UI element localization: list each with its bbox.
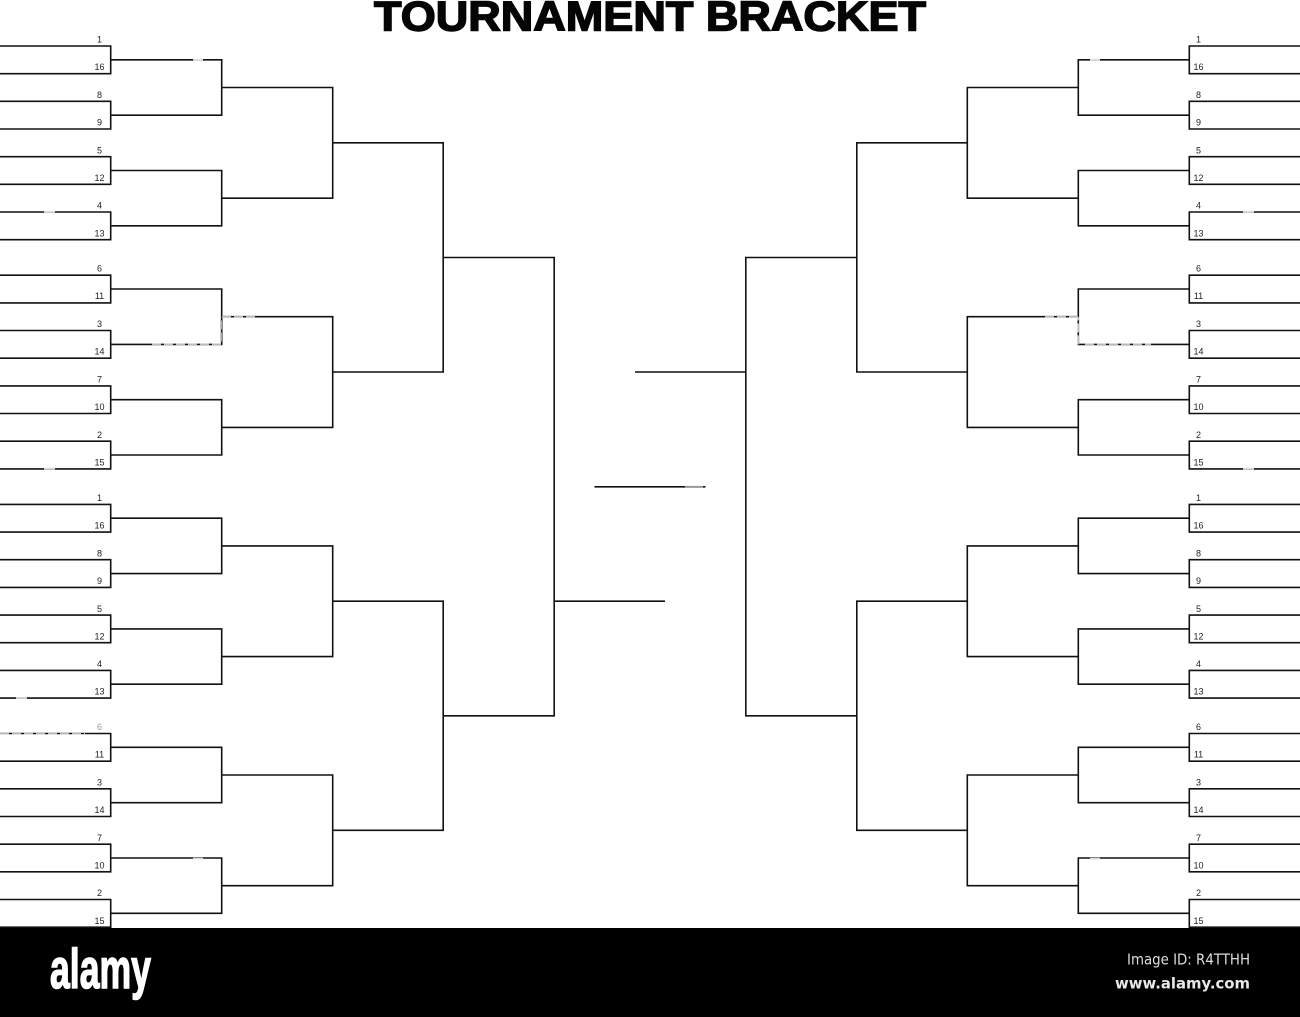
right seeds region 4: 15: [1193, 916, 1204, 926]
right seeds region 2: 6: [1196, 264, 1201, 274]
right seeds region 3: 8: [1196, 548, 1201, 558]
left region 4: 2: [97, 888, 102, 898]
right seeds region 3: 5: [1196, 604, 1201, 614]
right seeds region 1: 9: [1196, 118, 1201, 128]
right seeds region 3: 4: [1196, 659, 1201, 669]
champion line: [594, 486, 706, 488]
right seeds region 1: 12: [1193, 173, 1204, 183]
right seeds region 4: [1193, 722, 1204, 926]
right seeds region 4: 2: [1196, 888, 1201, 898]
right seeds region 1: 13: [1193, 228, 1204, 238]
left region 3: 4: [97, 659, 102, 669]
right seeds region 3: 16: [1193, 520, 1204, 530]
left region 1: 5: [97, 146, 102, 156]
left region 4: 6: [97, 722, 102, 732]
left region 4: 10: [94, 860, 105, 870]
website: www.alamy.com: [1115, 974, 1250, 992]
right seeds region 3: 13: [1193, 687, 1204, 697]
left region 3: 13: [94, 687, 105, 697]
right seeds region 4: 7: [1196, 833, 1201, 843]
left region 2: 2: [97, 430, 102, 440]
right bracket: [635, 34, 1300, 927]
right seeds region 2: 15: [1193, 458, 1204, 468]
right seeds region 1: 1: [1196, 34, 1201, 44]
right seeds region 3: 9: [1196, 576, 1201, 586]
right seeds region 2: 14: [1193, 347, 1204, 357]
right seeds region 1: 5: [1196, 146, 1201, 156]
left region 1: 4: [97, 201, 102, 211]
left region 1: 13: [94, 228, 105, 238]
right seeds region 2: 10: [1193, 402, 1204, 412]
right seeds region 4: 11: [1194, 750, 1203, 760]
left region 2: 15: [94, 458, 105, 468]
left region 3: [0, 493, 333, 698]
left region 2: 11: [95, 291, 104, 301]
footer band: [0, 928, 1300, 1017]
right seeds region 1: 8: [1196, 90, 1201, 100]
left region 4: 15: [94, 916, 105, 926]
left region 4: 14: [94, 805, 105, 815]
left region 1: [0, 34, 333, 240]
right seeds region 4: 14: [1193, 805, 1204, 815]
right seeds region 3: 1: [1196, 493, 1201, 503]
right seeds region 4: 6: [1196, 722, 1201, 732]
left region 4: 7: [97, 833, 102, 843]
right seeds region 1: 16: [1193, 62, 1204, 72]
left region 4: 11: [95, 750, 104, 760]
left region 3: 12: [94, 631, 105, 641]
left region 1: 1: [97, 34, 102, 44]
right seeds region 2: 3: [1196, 319, 1201, 329]
right seeds region 3: [1193, 493, 1204, 697]
left region 2: 14: [94, 347, 105, 357]
left region 3: 5: [97, 604, 102, 614]
left region 4: [0, 722, 333, 927]
image id: Image ID: R4TTHH: [1127, 950, 1250, 968]
left region 1: 9: [97, 118, 102, 128]
right seeds region 4: 3: [1196, 778, 1201, 788]
left later-round connectors: [333, 143, 665, 830]
left region 2: 7: [97, 375, 102, 385]
left region 3: 1: [97, 493, 102, 503]
left bracket: [0, 34, 665, 927]
right connector lines: [635, 46, 1300, 927]
left region 2: [0, 264, 333, 469]
right seeds region 4: 10: [1193, 860, 1204, 870]
right seeds region 2: 7: [1196, 375, 1201, 385]
left region 3: 8: [97, 548, 102, 558]
left region 3: 16: [94, 520, 105, 530]
left region 2: 6: [97, 264, 102, 274]
footer logo: alamy: [50, 937, 151, 1000]
right seeds region 3: 12: [1193, 631, 1204, 641]
left region 2: 10: [94, 402, 105, 412]
left region 4: 3: [97, 778, 102, 788]
right seeds region 1: 4: [1196, 201, 1201, 211]
left region 2: 3: [97, 319, 102, 329]
left region 1: 16: [94, 62, 105, 72]
right seeds region 2: 2: [1196, 430, 1201, 440]
left region 1: 8: [97, 90, 102, 100]
left region 1: 12: [94, 173, 105, 183]
right seeds region 1: [1193, 34, 1204, 238]
left region 3: 9: [97, 576, 102, 586]
right seeds region 2: [1193, 264, 1204, 468]
right seeds region 2: 11: [1194, 291, 1203, 301]
